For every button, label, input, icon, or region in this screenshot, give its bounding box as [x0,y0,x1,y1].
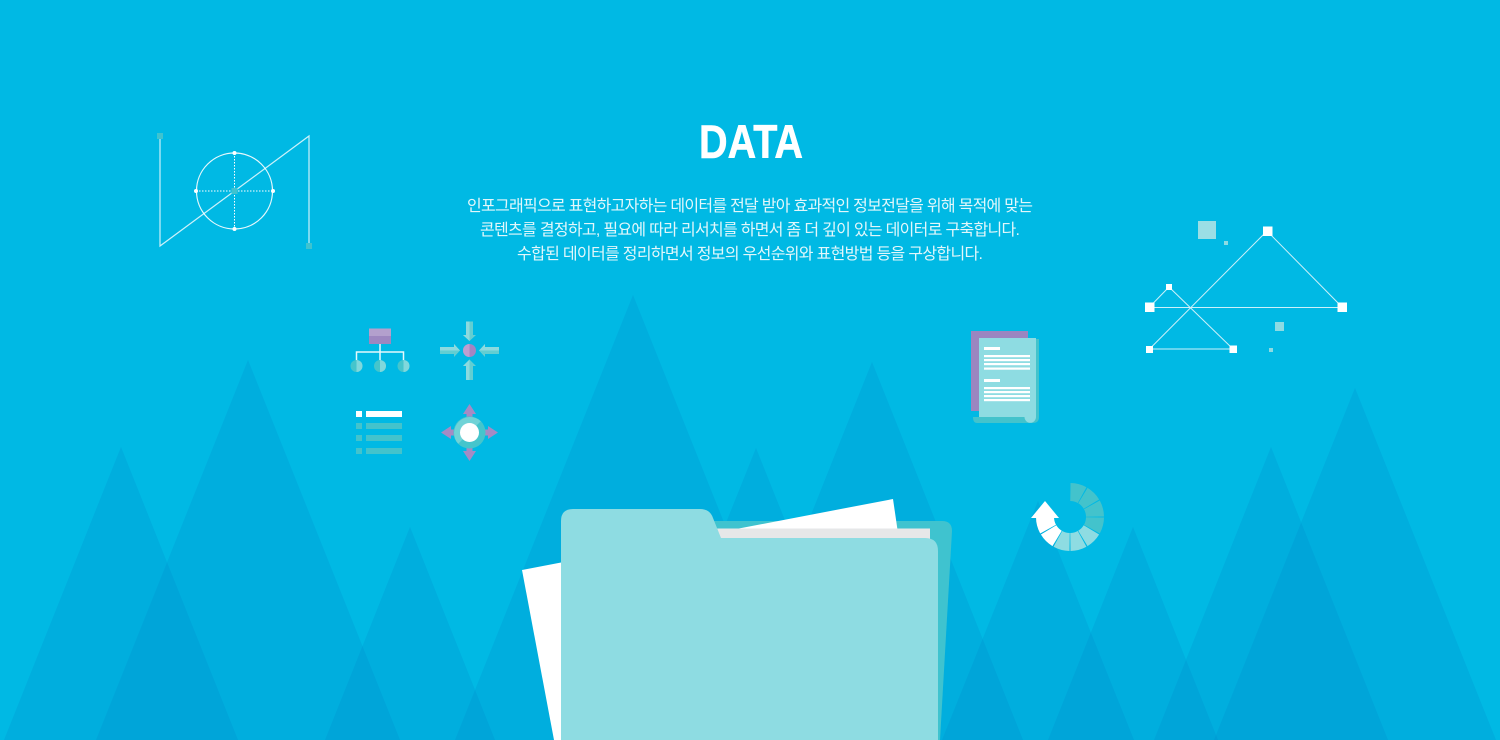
description text: 콘텐츠를 결정하고, 필요에 따라 리서치를 하면서 좀 더 깊이 있는 데이터로 구축합니다. [480,221,1020,239]
icon: circular progress arrow [1031,492,1095,542]
background mountains [4,295,1496,740]
folder back [700,521,952,740]
icon: documents [971,331,1039,423]
icon: arrows converging [440,322,499,380]
icon: folder with papers [522,499,952,740]
title: DATA [699,115,803,168]
back sheet of paper [522,499,899,740]
icon: org chart [350,328,410,372]
icon: list [356,411,402,454]
description text: 수합된 데이터를 정리하면서 정보의 우선순위와 표현방법 등을 구상합니다. [517,245,983,263]
description text: 인포그래픽으로 표현하고자하는 데이터를 전달 받아 효과적인 정보전달을 위해 목적에 맞는 [467,197,1033,215]
folder front [561,509,938,740]
description text [467,197,1033,263]
grey inner sheet [700,528,930,542]
icon: network triangles [1145,221,1347,353]
icon: circle target line diagram [157,133,312,249]
icon: arrows diverging [441,404,498,461]
